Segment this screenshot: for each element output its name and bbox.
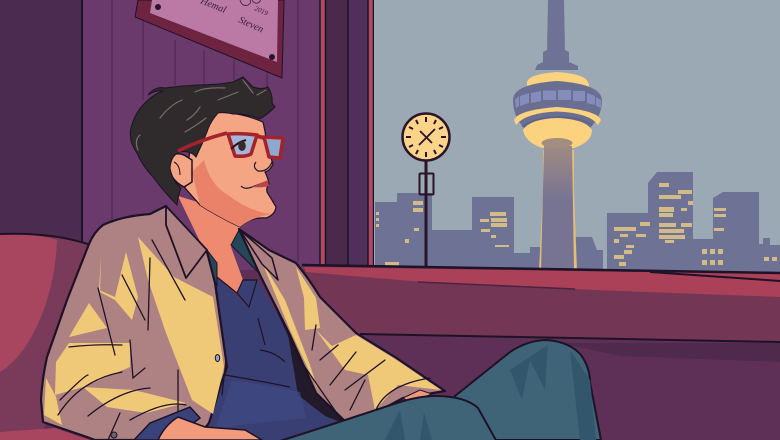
ear (168, 154, 192, 187)
man (41, 77, 601, 440)
glasses (178, 133, 283, 158)
observation tower (513, 0, 602, 271)
jacket inner shadow and shirt (205, 262, 348, 440)
neck (178, 196, 243, 293)
jacket button (215, 354, 220, 362)
building windows (376, 183, 777, 266)
tower lit bowl (523, 118, 592, 148)
sofa back (0, 234, 88, 440)
jaw shadow (192, 160, 272, 227)
shirt v collar (217, 277, 257, 307)
plaque handwriting: Steven (237, 15, 265, 35)
plaque panel (150, 0, 278, 62)
tower pod (513, 81, 602, 128)
eye (231, 140, 246, 151)
lens left (228, 134, 257, 156)
sofa (0, 234, 90, 440)
far hand (403, 390, 432, 402)
tower lit ring (514, 107, 601, 125)
jacket right body (239, 229, 445, 425)
clock face (402, 114, 450, 160)
hand on lap (158, 417, 262, 440)
lens right (264, 137, 283, 158)
plaque frame (135, 0, 284, 78)
jacket collar (166, 206, 207, 278)
city skyline buildings (375, 172, 780, 276)
nose and mouth (241, 162, 272, 188)
hair (130, 77, 275, 205)
trousers near leg (277, 396, 497, 440)
window frame (320, 0, 374, 268)
trousers far leg (455, 340, 601, 440)
head (130, 77, 283, 227)
plaque handwriting: 2019 (253, 5, 270, 18)
tower upper ring (527, 72, 589, 88)
jacket left body (41, 206, 227, 440)
clock post (420, 160, 434, 268)
plaque on wall (135, 0, 284, 78)
tower spire (535, 0, 578, 70)
sky (374, 0, 780, 275)
hair highlights (136, 80, 266, 150)
street clock (402, 114, 450, 268)
window sill (302, 265, 780, 362)
shirt collar (200, 230, 269, 285)
jacket (41, 206, 445, 440)
jacket folds (58, 240, 430, 440)
tower windows (515, 90, 601, 108)
jacket lit patches (44, 237, 441, 425)
plaque handwriting (198, 0, 270, 35)
tower shaft (539, 138, 577, 271)
face (185, 112, 276, 227)
trouser shading (385, 345, 596, 440)
shirt cuff (134, 407, 200, 440)
